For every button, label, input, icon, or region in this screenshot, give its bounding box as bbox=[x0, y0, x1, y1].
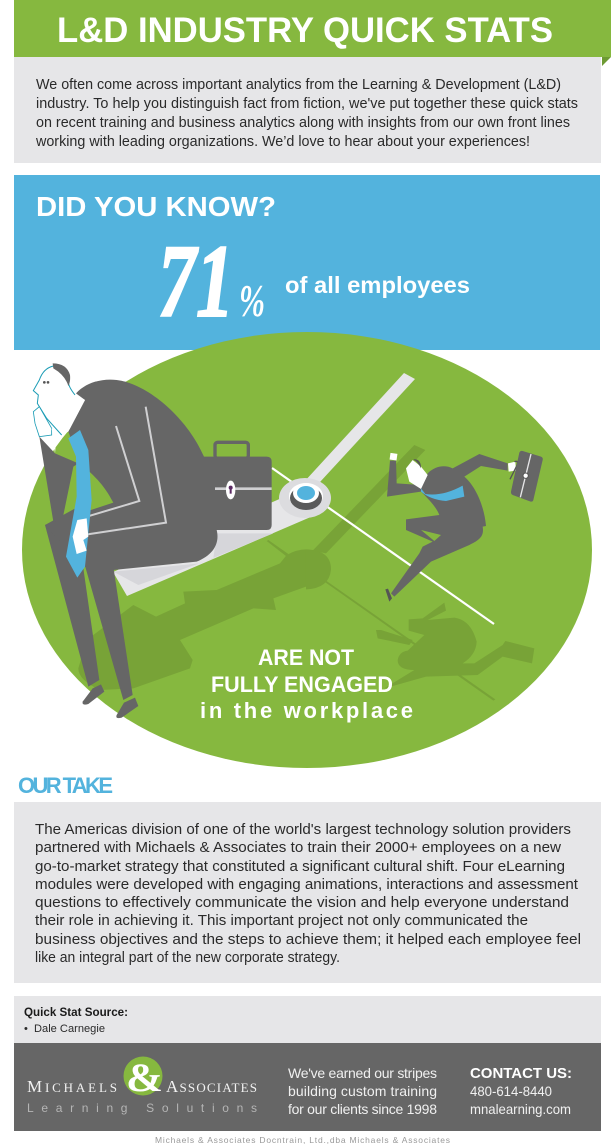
tie bbox=[66, 430, 92, 578]
panel: title banner bbox=[14, 0, 611, 66]
statistic: 71 percent: % bbox=[239, 275, 265, 326]
panel: quick stat source: Dale Carnegie bbox=[34, 1023, 105, 1035]
text: contact bbox=[470, 1065, 572, 1117]
text: of all employees: of all employees bbox=[285, 272, 470, 298]
text: contact: mnalearning.com bbox=[470, 1101, 571, 1117]
briefcase clasp bbox=[226, 481, 235, 499]
clock hand: second hand bbox=[272, 468, 494, 624]
panel: our take text: modules were developed with engaging animations, interactions and assessment bbox=[35, 876, 579, 893]
text: are not fully engaged in the workplace: in the workplace bbox=[200, 698, 413, 723]
panel: quick stat source: Quick Stat Source: bbox=[24, 1007, 128, 1019]
text: tagline: for our clients since 1998 bbox=[288, 1101, 437, 1117]
clock hand: bench hand bbox=[113, 490, 320, 596]
briefcase handle bbox=[215, 442, 248, 458]
hair bbox=[413, 459, 421, 468]
text: tagline: We've earned our stripes bbox=[288, 1065, 437, 1081]
panel: did you know bbox=[14, 175, 600, 350]
text: contact: 480-614-8440 bbox=[470, 1083, 552, 1099]
text: contact: CONTACT US: bbox=[470, 1065, 572, 1082]
hand on knee bbox=[73, 518, 88, 554]
text: are not fully engaged in the workplace: ARE NOT bbox=[258, 645, 355, 670]
panel: introduction bbox=[14, 57, 601, 163]
shirt collar bbox=[52, 428, 57, 453]
clock hand: minute hand bbox=[304, 373, 415, 482]
panel: introduction: We often come across important analytics from the Learning & Development (L&D) bbox=[36, 76, 561, 93]
text: company line: Michaels & Associates Docntrain, Ltd.,dba Michaels & Associates bbox=[155, 1135, 450, 1145]
panel: introduction: working with leading organizations. We’d love to hear about your experiences! bbox=[35, 133, 530, 150]
back leg bbox=[45, 507, 99, 687]
raised arm bbox=[387, 461, 421, 497]
text: tagline: building custom training bbox=[288, 1083, 437, 1099]
panel: our take text: partnered with Michaels & Associates to train their 2000+ employees on a new bbox=[35, 839, 561, 856]
tie bbox=[421, 486, 464, 501]
statistic: 71 percent: 71 bbox=[158, 224, 234, 339]
clock hands and hub bbox=[113, 373, 494, 624]
panel: quick stat source bbox=[14, 996, 601, 1043]
panel: introduction: industry. To help you distinguish fact from fiction, we've put together these quick stats bbox=[36, 95, 578, 112]
panel: our take text: their role in achieving it. This important project not only communicated the bbox=[35, 912, 528, 929]
panel: quick stat source: • bbox=[24, 1023, 28, 1035]
shoe bbox=[385, 589, 392, 602]
text: are not fully engaged in the workplace: FULLY ENGAGED bbox=[211, 672, 393, 697]
eyes bbox=[43, 381, 49, 384]
head bbox=[33, 366, 85, 435]
logo: Michaels & Associates: & bbox=[126, 1055, 163, 1100]
shoes bbox=[83, 684, 138, 718]
panel: our take text: The Americas division of one of the world's largest technology solution providers bbox=[35, 821, 571, 838]
text: are not fully engaged in the workplace bbox=[200, 645, 413, 723]
heading: our take: OUR TAKE bbox=[18, 773, 113, 798]
logo: Michaels & Associates bbox=[27, 1055, 257, 1115]
heading: did you know: DID YOU KNOW? bbox=[36, 191, 276, 222]
supporting arm bbox=[39, 437, 78, 522]
panel: introduction: on recent training and business analytics along with insights from our own front lines bbox=[36, 114, 570, 131]
fist bbox=[390, 453, 397, 460]
panel: our take text: like an integral part of the new corporate strategy. bbox=[35, 949, 340, 966]
figure: seated businessman with briefcase bbox=[33, 363, 273, 718]
panel: our take text bbox=[14, 802, 601, 983]
clock hub bbox=[279, 478, 331, 518]
shadows on the clock face bbox=[78, 445, 534, 701]
panel: our take text: business objectives and the steps to achieve them; it helped each employee feel bbox=[35, 931, 581, 948]
hand at chin bbox=[33, 407, 52, 437]
panel: our take text: questions to effectively communicate the vision and help everyone understand bbox=[35, 894, 569, 911]
title: L&D INDUSTRY QUICK STATS bbox=[57, 11, 553, 50]
hair bbox=[53, 363, 70, 386]
logo: Michaels & Associates: MICHAELS bbox=[27, 1077, 117, 1096]
suit bbox=[391, 454, 508, 597]
logo: Michaels & Associates: Learning Solutions bbox=[27, 1101, 257, 1115]
suit seams bbox=[87, 407, 272, 534]
figure: running businessman bbox=[385, 451, 543, 602]
panel: our take text: go-to-market strategy that constituted a significant cultural shift. Four eLearning bbox=[35, 858, 565, 875]
front leg bbox=[83, 560, 133, 700]
logo: Michaels & Associates: ASSOCIATES bbox=[166, 1077, 257, 1096]
head bbox=[406, 460, 428, 489]
panel: footer bbox=[14, 1043, 601, 1131]
clock illustration: green circle bbox=[22, 332, 592, 768]
hand and briefcase bbox=[508, 451, 543, 502]
text: tagline bbox=[288, 1065, 437, 1117]
suit body bbox=[45, 380, 272, 570]
